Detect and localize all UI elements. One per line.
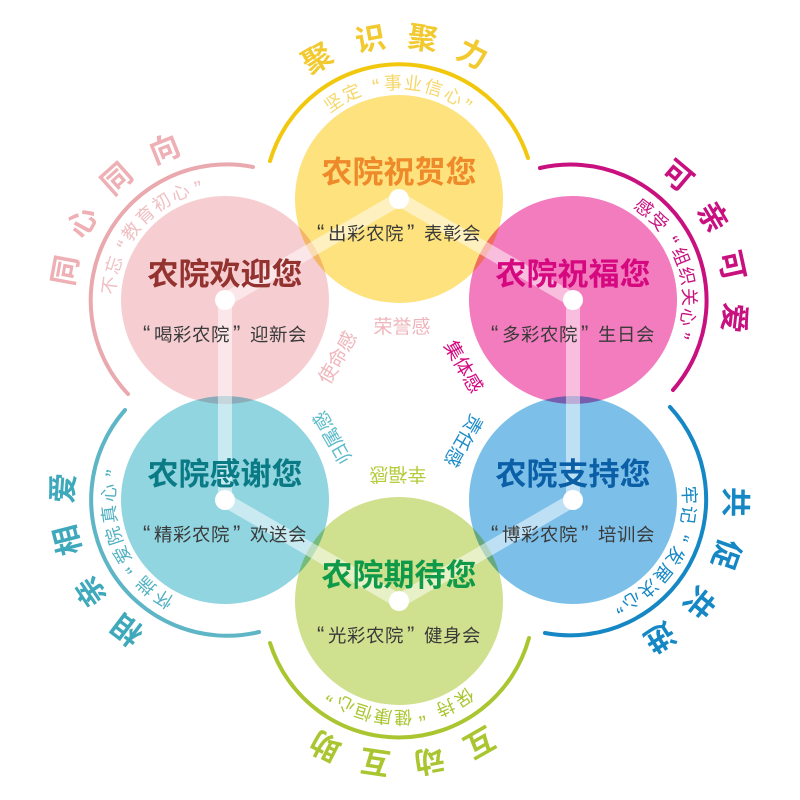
arc group: green: 恒 xyxy=(352,699,375,724)
panel: yellow circle text: 出彩农院 xyxy=(328,223,404,244)
arc group: magenta: 受 xyxy=(645,208,672,235)
panel: magenta circle text: 农院祝福您 xyxy=(496,257,650,292)
panel: blue circle text: ” xyxy=(581,521,589,546)
arc group: teal xyxy=(46,410,259,651)
panel: magenta circle text: “ xyxy=(491,321,499,346)
arc group: magenta: 可 xyxy=(655,154,699,199)
panel: pink circle text: 迎新会 xyxy=(250,324,307,345)
arc group: green: 心 xyxy=(333,691,358,717)
panel: magenta circle text xyxy=(491,257,655,346)
arc group: teal: 心 xyxy=(99,483,120,502)
arc group: magenta: 亲 xyxy=(690,196,734,239)
panel: yellow circle text xyxy=(317,155,481,245)
panel: blue circle text: 农院支持您 xyxy=(496,457,650,492)
panel: green circle text: 农院期待您 xyxy=(322,558,476,593)
arc group: teal: 揣 xyxy=(133,572,160,599)
arc group: yellow: 聚 xyxy=(405,21,440,58)
panel: green circle text: ” xyxy=(407,622,415,647)
center hexagon labels: 责任感 xyxy=(439,410,487,470)
arc group: magenta: 可 xyxy=(711,247,750,284)
arc group: teal: 相 xyxy=(106,607,150,651)
panel: yellow circle text: “ xyxy=(317,220,325,245)
arc group: blue: 展 xyxy=(650,560,677,586)
center hexagon labels: 归属感 xyxy=(309,407,357,467)
arc group: green: ” xyxy=(322,682,343,707)
panel: magenta circle text: 生日会 xyxy=(598,324,655,345)
panel: green circle text: 健身会 xyxy=(424,625,481,646)
center hexagon labels xyxy=(309,316,487,485)
arc group: yellow: 力 xyxy=(451,33,493,76)
panel: yellow circle text: 表彰会 xyxy=(424,223,481,244)
arc group: pink: 忘 xyxy=(102,254,127,277)
panel: teal circle text: “ xyxy=(143,521,151,546)
six overlapping circles xyxy=(121,95,677,705)
arc group: yellow: 坚 xyxy=(321,90,347,116)
arc group: teal: 爱 xyxy=(110,542,136,567)
panel: pink circle text xyxy=(143,257,307,346)
arc group: pink: 初 xyxy=(149,189,175,216)
arc group: green: 互 xyxy=(458,720,500,763)
arc group: green: 康 xyxy=(373,705,393,727)
arc group: teal: 相 xyxy=(49,521,88,559)
panel: magenta circle text: ” xyxy=(581,321,589,346)
panel: green circle text: 光彩农院 xyxy=(328,625,404,646)
arc group: teal: 爱 xyxy=(46,472,81,504)
center hexagon labels: 荣誉感 xyxy=(373,316,431,338)
arc group: teal: 院 xyxy=(102,524,127,547)
node dots xyxy=(215,189,583,611)
arc group: blue: 心 xyxy=(619,587,644,613)
panel: yellow circle text: ” xyxy=(407,220,415,245)
arc group: pink xyxy=(47,129,253,394)
panel: pink circle text: 农院欢迎您 xyxy=(148,257,302,292)
arc group: magenta: 组 xyxy=(668,244,693,269)
panel: pink circle text: “ xyxy=(143,321,151,346)
panel: teal circle text: 农院感谢您 xyxy=(148,457,302,492)
center hexagon labels: 幸福感 xyxy=(369,463,427,485)
arc group: magenta: 关 xyxy=(679,288,699,306)
arc group: green: 助 xyxy=(305,724,347,767)
panel: blue circle text: 博彩农院 xyxy=(502,524,578,545)
panel: blue circle text xyxy=(491,457,655,546)
arc group: pink: 心 xyxy=(62,202,105,244)
arc group: blue: 进 xyxy=(638,615,681,659)
arc group: pink: 心 xyxy=(168,180,193,206)
arc group: green: “ xyxy=(415,700,427,726)
panel: pink circle text: ” xyxy=(233,321,241,346)
arc group: pink: 不 xyxy=(99,275,121,296)
arc group: teal: 亲 xyxy=(70,569,114,613)
arc group: pink: 同 xyxy=(47,253,85,288)
arc group: green: 健 xyxy=(394,707,412,727)
arc group: pink: 同 xyxy=(95,157,140,202)
arc group: green: 动 xyxy=(411,741,447,779)
arc group: yellow: 聚 xyxy=(296,38,339,81)
arc group: green xyxy=(270,638,529,779)
panel: magenta circle text: 多彩农院 xyxy=(502,324,578,345)
arc group: magenta: 织 xyxy=(675,265,698,287)
arc group: pink: 向 xyxy=(145,129,185,171)
arc group: blue: 决 xyxy=(635,575,662,602)
arc group: yellow: 识 xyxy=(353,21,388,59)
arc group: yellow: 信 xyxy=(422,76,445,100)
center hexagon labels: 使命感 xyxy=(314,328,362,388)
arc group: blue: 共 xyxy=(676,580,721,624)
arc group: blue: 促 xyxy=(705,534,746,574)
arc group: blue: 记 xyxy=(677,505,699,525)
arc group: pink: 教 xyxy=(118,218,145,245)
arc group: green: 持 xyxy=(433,695,457,720)
arc group: yellow: 心 xyxy=(441,83,466,110)
panel: pink circle text: 喝彩农院 xyxy=(154,324,230,345)
arc group: teal: ” xyxy=(100,468,126,481)
panel: teal circle text xyxy=(143,457,307,546)
arc group: green: 互 xyxy=(358,742,393,779)
arc group: magenta: “ xyxy=(659,232,684,251)
arc group: blue: 发 xyxy=(662,543,688,568)
panel: teal circle text: ” xyxy=(233,521,241,546)
arc group: teal: “ xyxy=(120,557,145,578)
arc group: teal: 真 xyxy=(99,504,121,524)
arc group: yellow xyxy=(270,21,528,161)
arc group: blue: 共 xyxy=(718,487,751,517)
arc group: blue: ” xyxy=(609,592,626,618)
connecting star lines xyxy=(225,199,573,601)
panel: blue circle text: 培训会 xyxy=(598,524,655,545)
arc group: yellow: 事 xyxy=(383,73,402,94)
arc group: blue xyxy=(545,407,751,659)
center hexagon labels: 集体感 xyxy=(439,337,487,397)
panel: blue circle text: “ xyxy=(491,521,499,546)
arc group: magenta: 爱 xyxy=(715,301,752,334)
arc group: blue: 牢 xyxy=(679,486,699,504)
arc group: yellow: 业 xyxy=(403,73,423,95)
arc group: yellow: 定 xyxy=(340,80,364,106)
arc group: pink: 育 xyxy=(132,202,159,229)
panel: yellow circle text: 农院祝贺您 xyxy=(322,155,476,190)
arc group: magenta: ” xyxy=(669,327,695,342)
arc group: teal: 怀 xyxy=(151,585,177,612)
arc group: green: 保 xyxy=(451,684,477,710)
arc group: yellow: ” xyxy=(456,94,476,118)
arc group: pink: “ xyxy=(111,237,137,255)
panel: green circle text: “ xyxy=(317,622,325,647)
panel: teal circle text: 精彩农院 xyxy=(154,524,230,545)
arc group: pink: ” xyxy=(192,176,205,202)
arc group: magenta: 感 xyxy=(630,195,657,221)
arc group: blue: “ xyxy=(668,530,694,545)
arc group: yellow: “ xyxy=(370,74,382,100)
panel: teal circle text: 欢送会 xyxy=(250,524,307,545)
arc group: magenta: 心 xyxy=(676,307,699,328)
panel: green circle text xyxy=(317,558,481,647)
arc group: magenta xyxy=(540,154,752,390)
